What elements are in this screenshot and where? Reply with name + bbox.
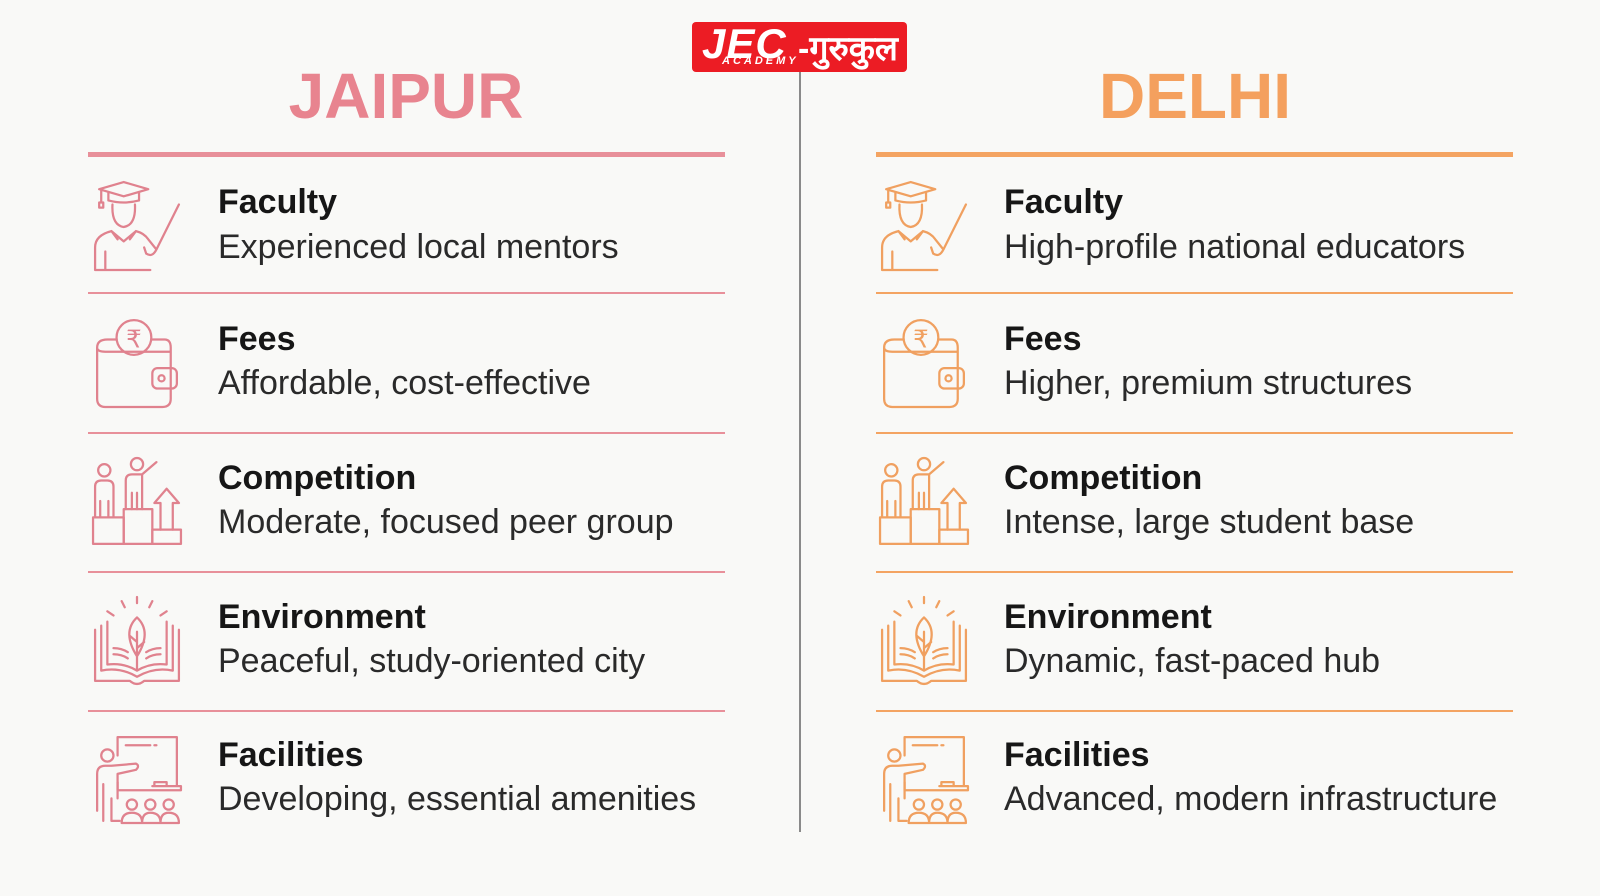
text: environment: Environment: [218, 598, 426, 636]
text: faculty: Faculty: [1004, 183, 1123, 221]
text: facilities: Facilities: [218, 736, 364, 774]
icon: environment: [94, 596, 180, 686]
delhi lines: [876, 152, 1513, 157]
logo: [692, 22, 907, 72]
text: faculty: Faculty: [218, 183, 337, 221]
jaipur lines: [88, 152, 725, 157]
icon: fees: [96, 319, 178, 408]
icon: facilities: [883, 736, 970, 824]
panel: Jaipur: Moderate, focused peer group: [218, 503, 674, 541]
panel: Jaipur: Developing, essential amenities: [218, 780, 696, 818]
logo: JEC: [702, 20, 787, 67]
panel: Delhi: Higher, premium structures: [1004, 364, 1412, 402]
text: competition: Competition: [218, 459, 416, 497]
heading: JAIPUR: JAIPUR: [289, 60, 523, 132]
icon: fees: ₹: [913, 325, 929, 354]
panel: Delhi: Intense, large student base: [1004, 503, 1414, 541]
icon: fees: [883, 319, 965, 408]
center divider: [799, 70, 801, 832]
icon: facilities: [96, 736, 182, 824]
icon: fees: ₹: [126, 325, 142, 354]
panel: Jaipur: Affordable, cost-effective: [218, 364, 591, 402]
text: fees: Fees: [218, 320, 296, 358]
icon: faculty: [94, 180, 180, 272]
heading: DELHI: DELHI: [1099, 60, 1291, 132]
panel: Delhi: Advanced, modern infrastructure: [1004, 780, 1497, 818]
text: facilities: Facilities: [1004, 736, 1150, 774]
icon: environment: [880, 596, 968, 686]
icon: competition: [92, 456, 182, 545]
icon: competition: [878, 456, 970, 545]
icon: faculty: [880, 180, 968, 272]
panel: Delhi: Dynamic, fast-paced hub: [1004, 642, 1380, 680]
panel: Delhi: High-profile national educators: [1004, 228, 1465, 266]
text: fees: Fees: [1004, 320, 1082, 358]
logo: -गुरुकुल: [798, 30, 898, 68]
panel: Jaipur: Experienced local mentors: [218, 228, 619, 266]
text: environment: Environment: [1004, 598, 1212, 636]
panel: Delhi: [878, 180, 1497, 824]
panel: Jaipur: Peaceful, study-oriented city: [218, 642, 645, 680]
logo: ACADEMY: [722, 55, 799, 67]
panel: Jaipur: [92, 180, 696, 824]
text: competition: Competition: [1004, 459, 1202, 497]
